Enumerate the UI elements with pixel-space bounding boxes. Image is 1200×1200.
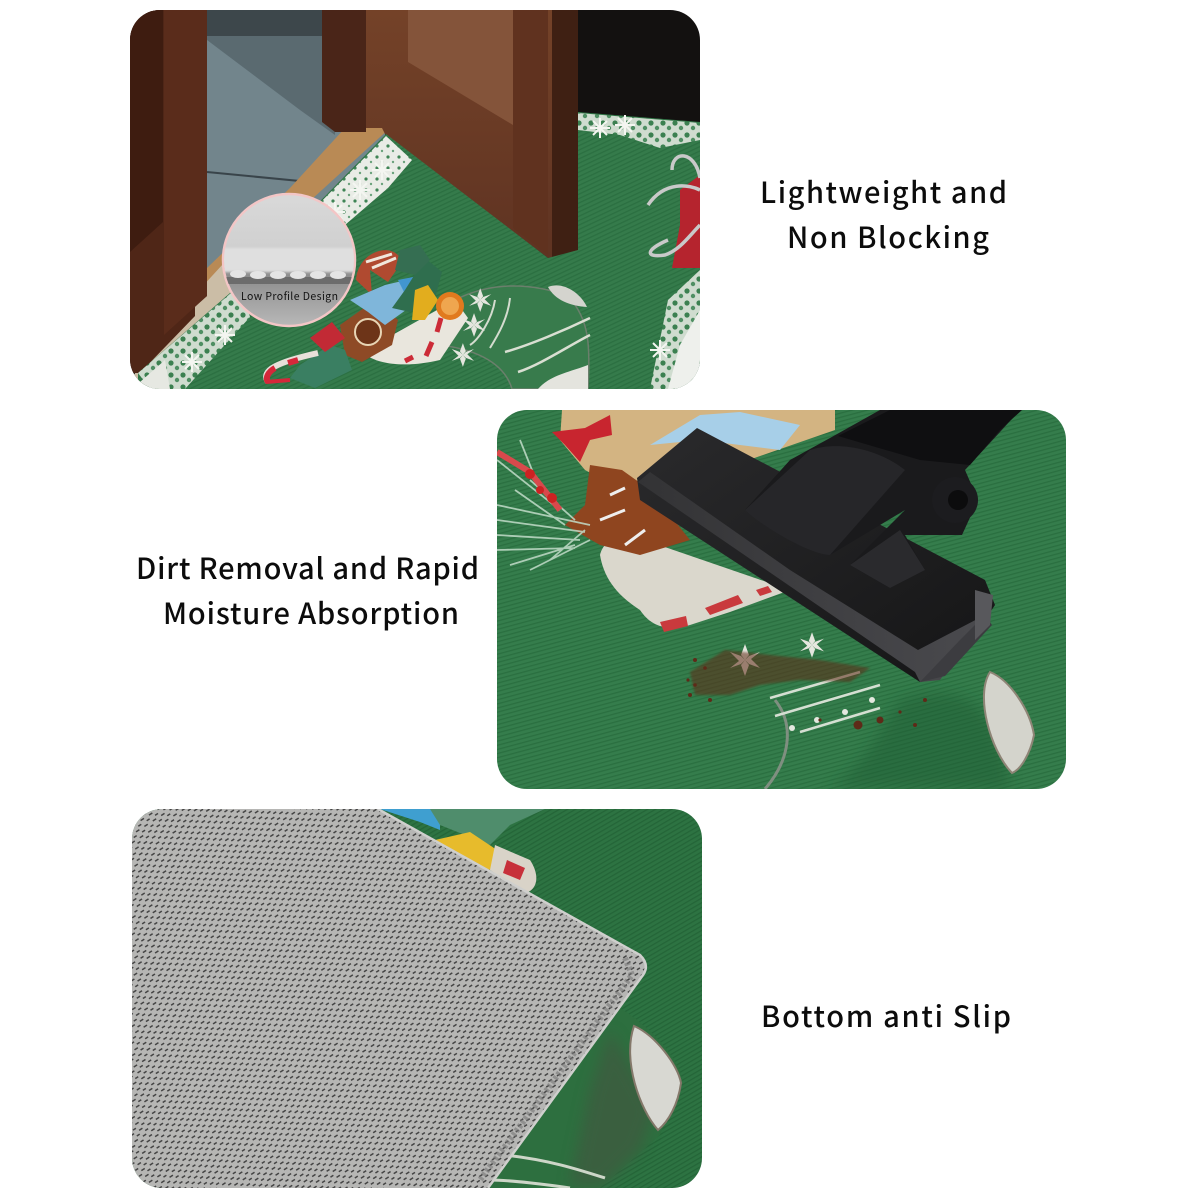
- stocking: [266, 245, 590, 389]
- inset caption: Low Profile Design: [241, 289, 338, 304]
- folded gray backing: [132, 809, 646, 1188]
- caption: lightweight: Non Blocking: [787, 215, 989, 257]
- caption: dirt removal: Moisture Absorption: [163, 591, 459, 633]
- spilled dirt: [686, 650, 927, 730]
- caption: dirt removal: Dirt Removal and Rapid: [136, 546, 479, 588]
- panel: anti slip underside photo: [132, 809, 702, 1188]
- caption: anti slip: Bottom anti Slip: [761, 994, 1011, 1036]
- peeking gifts and bell: [380, 809, 545, 893]
- caption: lightweight: [760, 170, 1007, 257]
- snowflake pattern on stocking: [730, 632, 880, 732]
- green mat: [138, 112, 700, 389]
- panel: lightweight door mat photo: [130, 10, 700, 400]
- left door frame: [130, 10, 207, 373]
- panel: vacuum on mat photo: [497, 410, 1066, 789]
- door: [322, 10, 578, 258]
- stocking with goods: [497, 410, 1034, 789]
- floor tiles: [207, 10, 385, 268]
- stocking on mat: [480, 1005, 682, 1188]
- door threshold: [207, 128, 384, 282]
- gift ribbons at right edge: [648, 156, 700, 268]
- vacuum head: [637, 410, 1022, 682]
- low profile inset circle: [222, 194, 356, 326]
- caption: dirt removal: [136, 546, 479, 633]
- caption: lightweight: Lightweight and: [760, 170, 1007, 212]
